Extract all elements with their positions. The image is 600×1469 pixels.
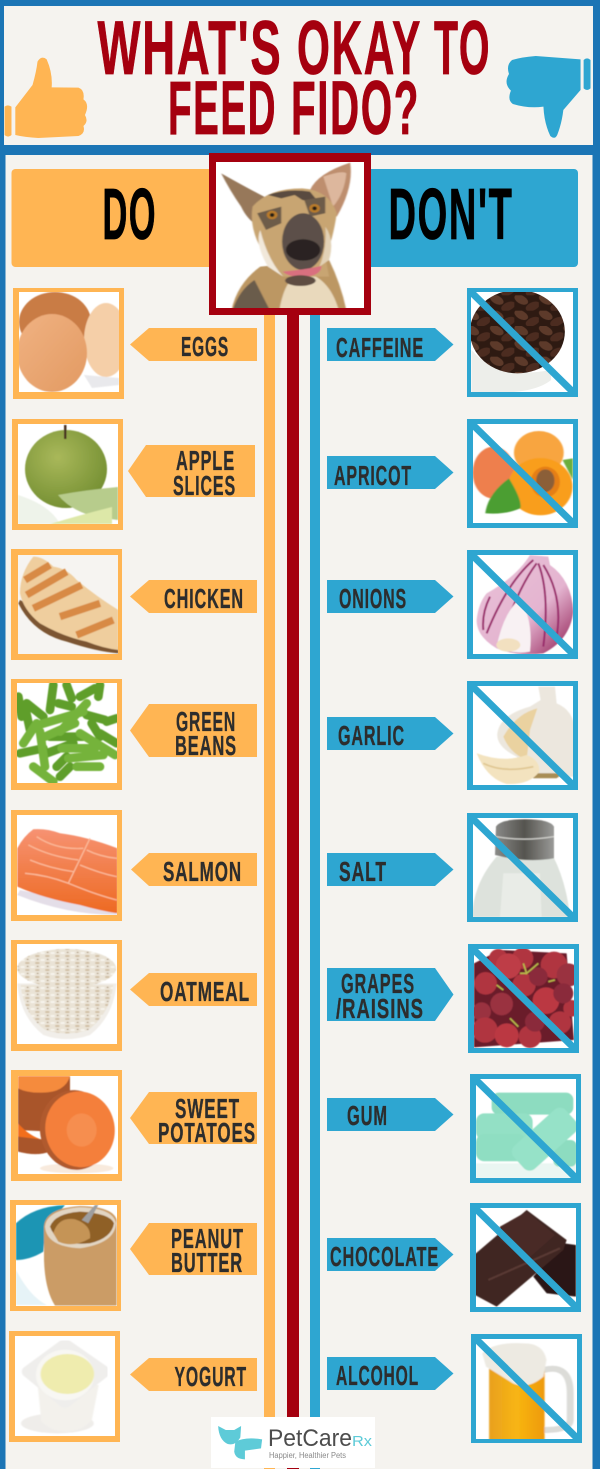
photo: apricots crossed out bbox=[467, 419, 578, 528]
label: chicken bbox=[130, 580, 257, 614]
heading banner: do: DO bbox=[102, 175, 157, 255]
photo: sweet potatoes bbox=[11, 1070, 122, 1181]
row: chicken (do) bbox=[11, 549, 257, 660]
orange divider line bbox=[264, 300, 275, 1469]
label: sweet potatoes: SWEET bbox=[175, 1093, 240, 1124]
label: alcohol: ALCOHOL bbox=[336, 1360, 419, 1391]
row: gum (don't) bbox=[327, 1074, 581, 1183]
label: caffeine bbox=[327, 328, 454, 363]
icon: cat and dog bbox=[218, 1426, 262, 1459]
title text: FEED bbox=[168, 66, 277, 151]
photo: chicken bbox=[11, 549, 122, 660]
blue divider line bbox=[310, 300, 320, 1469]
logo wordmark: PetCare bbox=[268, 1425, 352, 1452]
label: grapes / raisins bbox=[327, 968, 454, 1024]
row: peanut butter (do) bbox=[10, 1200, 257, 1311]
photo: apple slices bbox=[12, 419, 123, 530]
photo: beer crossed out bbox=[471, 1334, 582, 1443]
row: garlic (don't) bbox=[327, 681, 578, 790]
row: caffeine (don't) bbox=[327, 288, 578, 397]
photo: peanut butter bbox=[10, 1200, 121, 1311]
dog portrait bbox=[209, 153, 371, 315]
label: alcohol bbox=[327, 1357, 454, 1391]
row: sweet potatoes (do) bbox=[11, 1070, 257, 1181]
title text: WHAT'S bbox=[98, 6, 282, 91]
row: salt (don't) bbox=[327, 813, 578, 922]
label: apple slices: APPLE bbox=[176, 445, 235, 476]
label: eggs: EGGS bbox=[181, 331, 229, 362]
photo: garlic crossed out bbox=[467, 681, 578, 790]
heading banner: don't bbox=[360, 169, 578, 267]
label: chicken: CHICKEN bbox=[164, 583, 244, 614]
row: salmon (do) bbox=[11, 810, 257, 921]
title panel bbox=[4, 6, 593, 151]
label: gum: GUM bbox=[347, 1100, 388, 1131]
red divider line bbox=[287, 300, 299, 1469]
row: yogurt (do) bbox=[9, 1331, 257, 1442]
label: salt bbox=[327, 853, 454, 887]
label: sweet potatoes: POTATOES bbox=[158, 1117, 256, 1148]
photo: eggs bbox=[13, 288, 128, 399]
logo suffix: Rx bbox=[352, 1433, 373, 1450]
heading banner: do bbox=[12, 169, 222, 267]
row: oatmeal (do) bbox=[11, 940, 257, 1051]
photo: gum crossed out bbox=[470, 1074, 581, 1183]
icon: thumbs down bbox=[507, 56, 591, 138]
row: apricot (don't) bbox=[327, 419, 578, 528]
logo: PetCareRx bbox=[211, 1417, 375, 1468]
label: yogurt bbox=[130, 1358, 257, 1392]
row: alcohol (don't) bbox=[327, 1334, 582, 1443]
label: apple slices bbox=[128, 445, 255, 501]
label: chocolate bbox=[327, 1238, 454, 1272]
photo: grapes crossed out bbox=[468, 944, 580, 1053]
photo: salmon bbox=[11, 810, 122, 921]
label: grapes / raisins: /RAISINS bbox=[336, 993, 424, 1024]
row: onions (don't) bbox=[327, 550, 578, 659]
title text: TO bbox=[434, 6, 491, 91]
label: yogurt: YOGURT bbox=[174, 1361, 247, 1392]
label: green beans: BEANS bbox=[175, 730, 237, 761]
label: grapes / raisins: GRAPES bbox=[341, 968, 415, 999]
label: oatmeal: OATMEAL bbox=[160, 976, 250, 1007]
label: salmon bbox=[131, 853, 257, 887]
row: grapes / raisins (don't) bbox=[327, 944, 580, 1053]
label: peanut butter: BUTTER bbox=[171, 1247, 243, 1278]
label: garlic: GARLIC bbox=[338, 720, 405, 751]
label: peanut butter bbox=[130, 1223, 257, 1278]
icon: thumbs up bbox=[5, 58, 87, 138]
row: eggs (do) bbox=[13, 288, 257, 399]
title text: OKAY bbox=[297, 6, 422, 91]
photo: salt shaker crossed out bbox=[467, 813, 578, 922]
label: caffeine: CAFFEINE bbox=[336, 332, 424, 363]
label: green beans bbox=[130, 704, 257, 761]
logo tagline: Happier, Healthier Pets bbox=[269, 1451, 346, 1460]
label: eggs bbox=[130, 328, 257, 362]
label: apricot: APRICOT bbox=[334, 460, 412, 491]
label: salt: SALT bbox=[339, 856, 387, 887]
label: apple slices: SLICES bbox=[173, 470, 236, 501]
label: green beans: GREEN bbox=[176, 706, 236, 737]
photo: green beans bbox=[11, 679, 122, 790]
label: gum bbox=[327, 1098, 454, 1131]
row: apple slices (do) bbox=[12, 419, 255, 530]
label: peanut butter: PEANUT bbox=[171, 1223, 244, 1254]
row: chocolate (don't) bbox=[327, 1203, 581, 1312]
photo: chocolate crossed out bbox=[470, 1203, 581, 1312]
title text: FIDO? bbox=[291, 66, 420, 151]
label: onions: ONIONS bbox=[339, 583, 407, 614]
photo: onion crossed out bbox=[467, 550, 578, 659]
label: salmon: SALMON bbox=[163, 856, 242, 887]
title text bbox=[98, 6, 491, 151]
row: green beans (do) bbox=[11, 679, 257, 790]
photo: yogurt bbox=[9, 1331, 120, 1442]
photo: oatmeal bbox=[11, 940, 122, 1051]
photo: coffee beans crossed out bbox=[467, 288, 578, 397]
label: oatmeal bbox=[130, 973, 257, 1007]
label: sweet potatoes bbox=[130, 1092, 257, 1148]
label: chocolate: CHOCOLATE bbox=[330, 1241, 439, 1272]
